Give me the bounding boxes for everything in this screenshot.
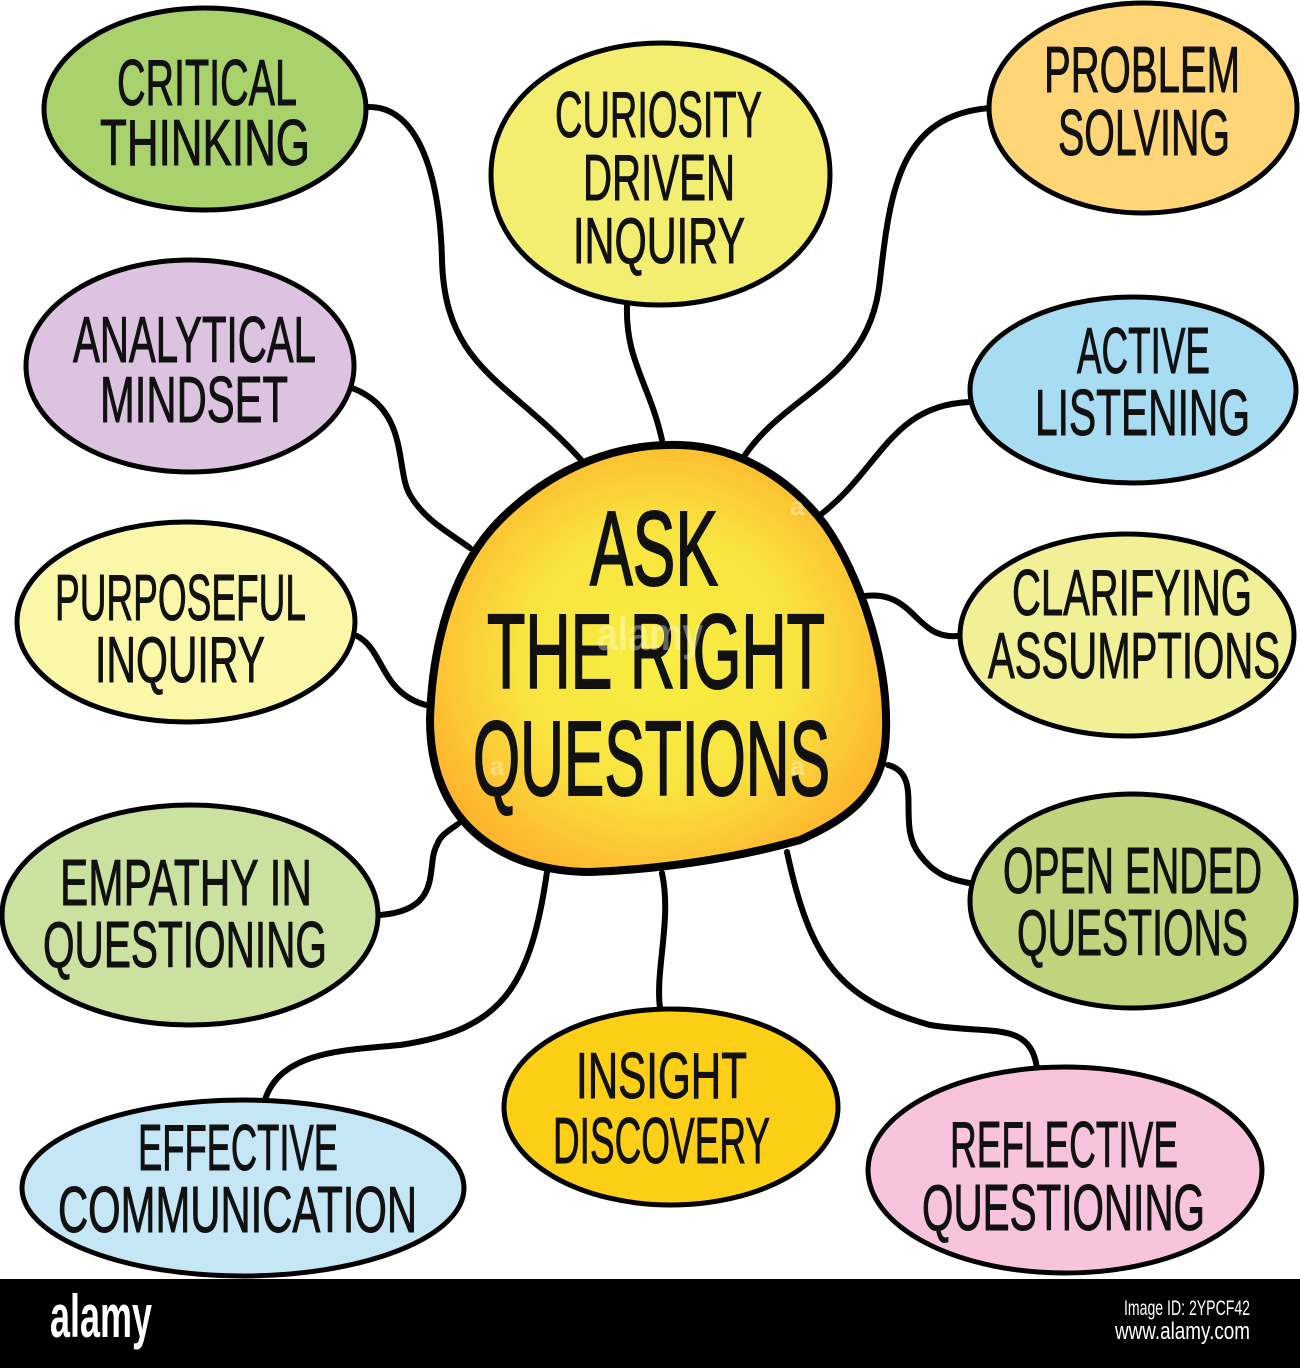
watermark: a [490, 751, 505, 781]
node: reflective questioning [868, 1067, 1262, 1273]
watermark: alamy [597, 608, 703, 660]
node: critical thinking: THINKING [100, 106, 310, 179]
node: critical thinking [44, 8, 366, 210]
node: effective communication [22, 1100, 464, 1276]
node: curiosity driven inquiry: CURIOSITY [555, 78, 762, 151]
node: empathy in questioning: QUESTIONING [43, 908, 327, 981]
node: insight discovery [504, 1009, 838, 1205]
node: curiosity driven inquiry: INQUIRY [573, 204, 745, 277]
node: clarifying assumptions [960, 534, 1294, 736]
node: open ended questions [970, 794, 1296, 1008]
node: curiosity driven inquiry: DRIVEN [583, 141, 735, 214]
node: purposeful inquiry: INQUIRY [95, 623, 265, 696]
footer bar: alamy [50, 1283, 152, 1350]
central topic: ask the right questions: QUESTIONS [473, 700, 830, 818]
node: empathy in questioning: EMPATHY IN [60, 846, 312, 919]
watermark: a [790, 751, 805, 781]
node: insight discovery: DISCOVERY [553, 1104, 770, 1177]
node: analytical mindset: MINDSET [100, 363, 288, 436]
watermark: a [790, 491, 805, 521]
watermark [490, 491, 805, 781]
connectors from centre to topics [265, 107, 1037, 1100]
node: empathy in questioning [2, 805, 378, 1025]
node: problem solving [989, 3, 1297, 213]
node: effective communication: COMMUNICATION [58, 1173, 417, 1246]
node: purposeful inquiry: PURPOSEFUL [55, 561, 306, 634]
node: critical thinking: CRITICAL [117, 46, 297, 119]
node: active listening [970, 297, 1296, 483]
central topic: ask the right questions: ASK [590, 490, 718, 608]
central topic: ask the right questions: THE RIGHT [487, 593, 825, 711]
node: purposeful inquiry [17, 522, 355, 722]
node: effective communication: EFFECTIVE [138, 1111, 338, 1184]
footer bar [0, 1279, 1300, 1368]
central topic: ask the right questions [430, 445, 886, 872]
node: analytical mindset: ANALYTICAL [73, 303, 316, 376]
node: analytical mindset [26, 260, 354, 472]
node: curiosity driven inquiry [491, 43, 830, 305]
node: insight discovery: INSIGHT [576, 1039, 747, 1112]
footer bar: www.alamy.com [1114, 1318, 1250, 1345]
